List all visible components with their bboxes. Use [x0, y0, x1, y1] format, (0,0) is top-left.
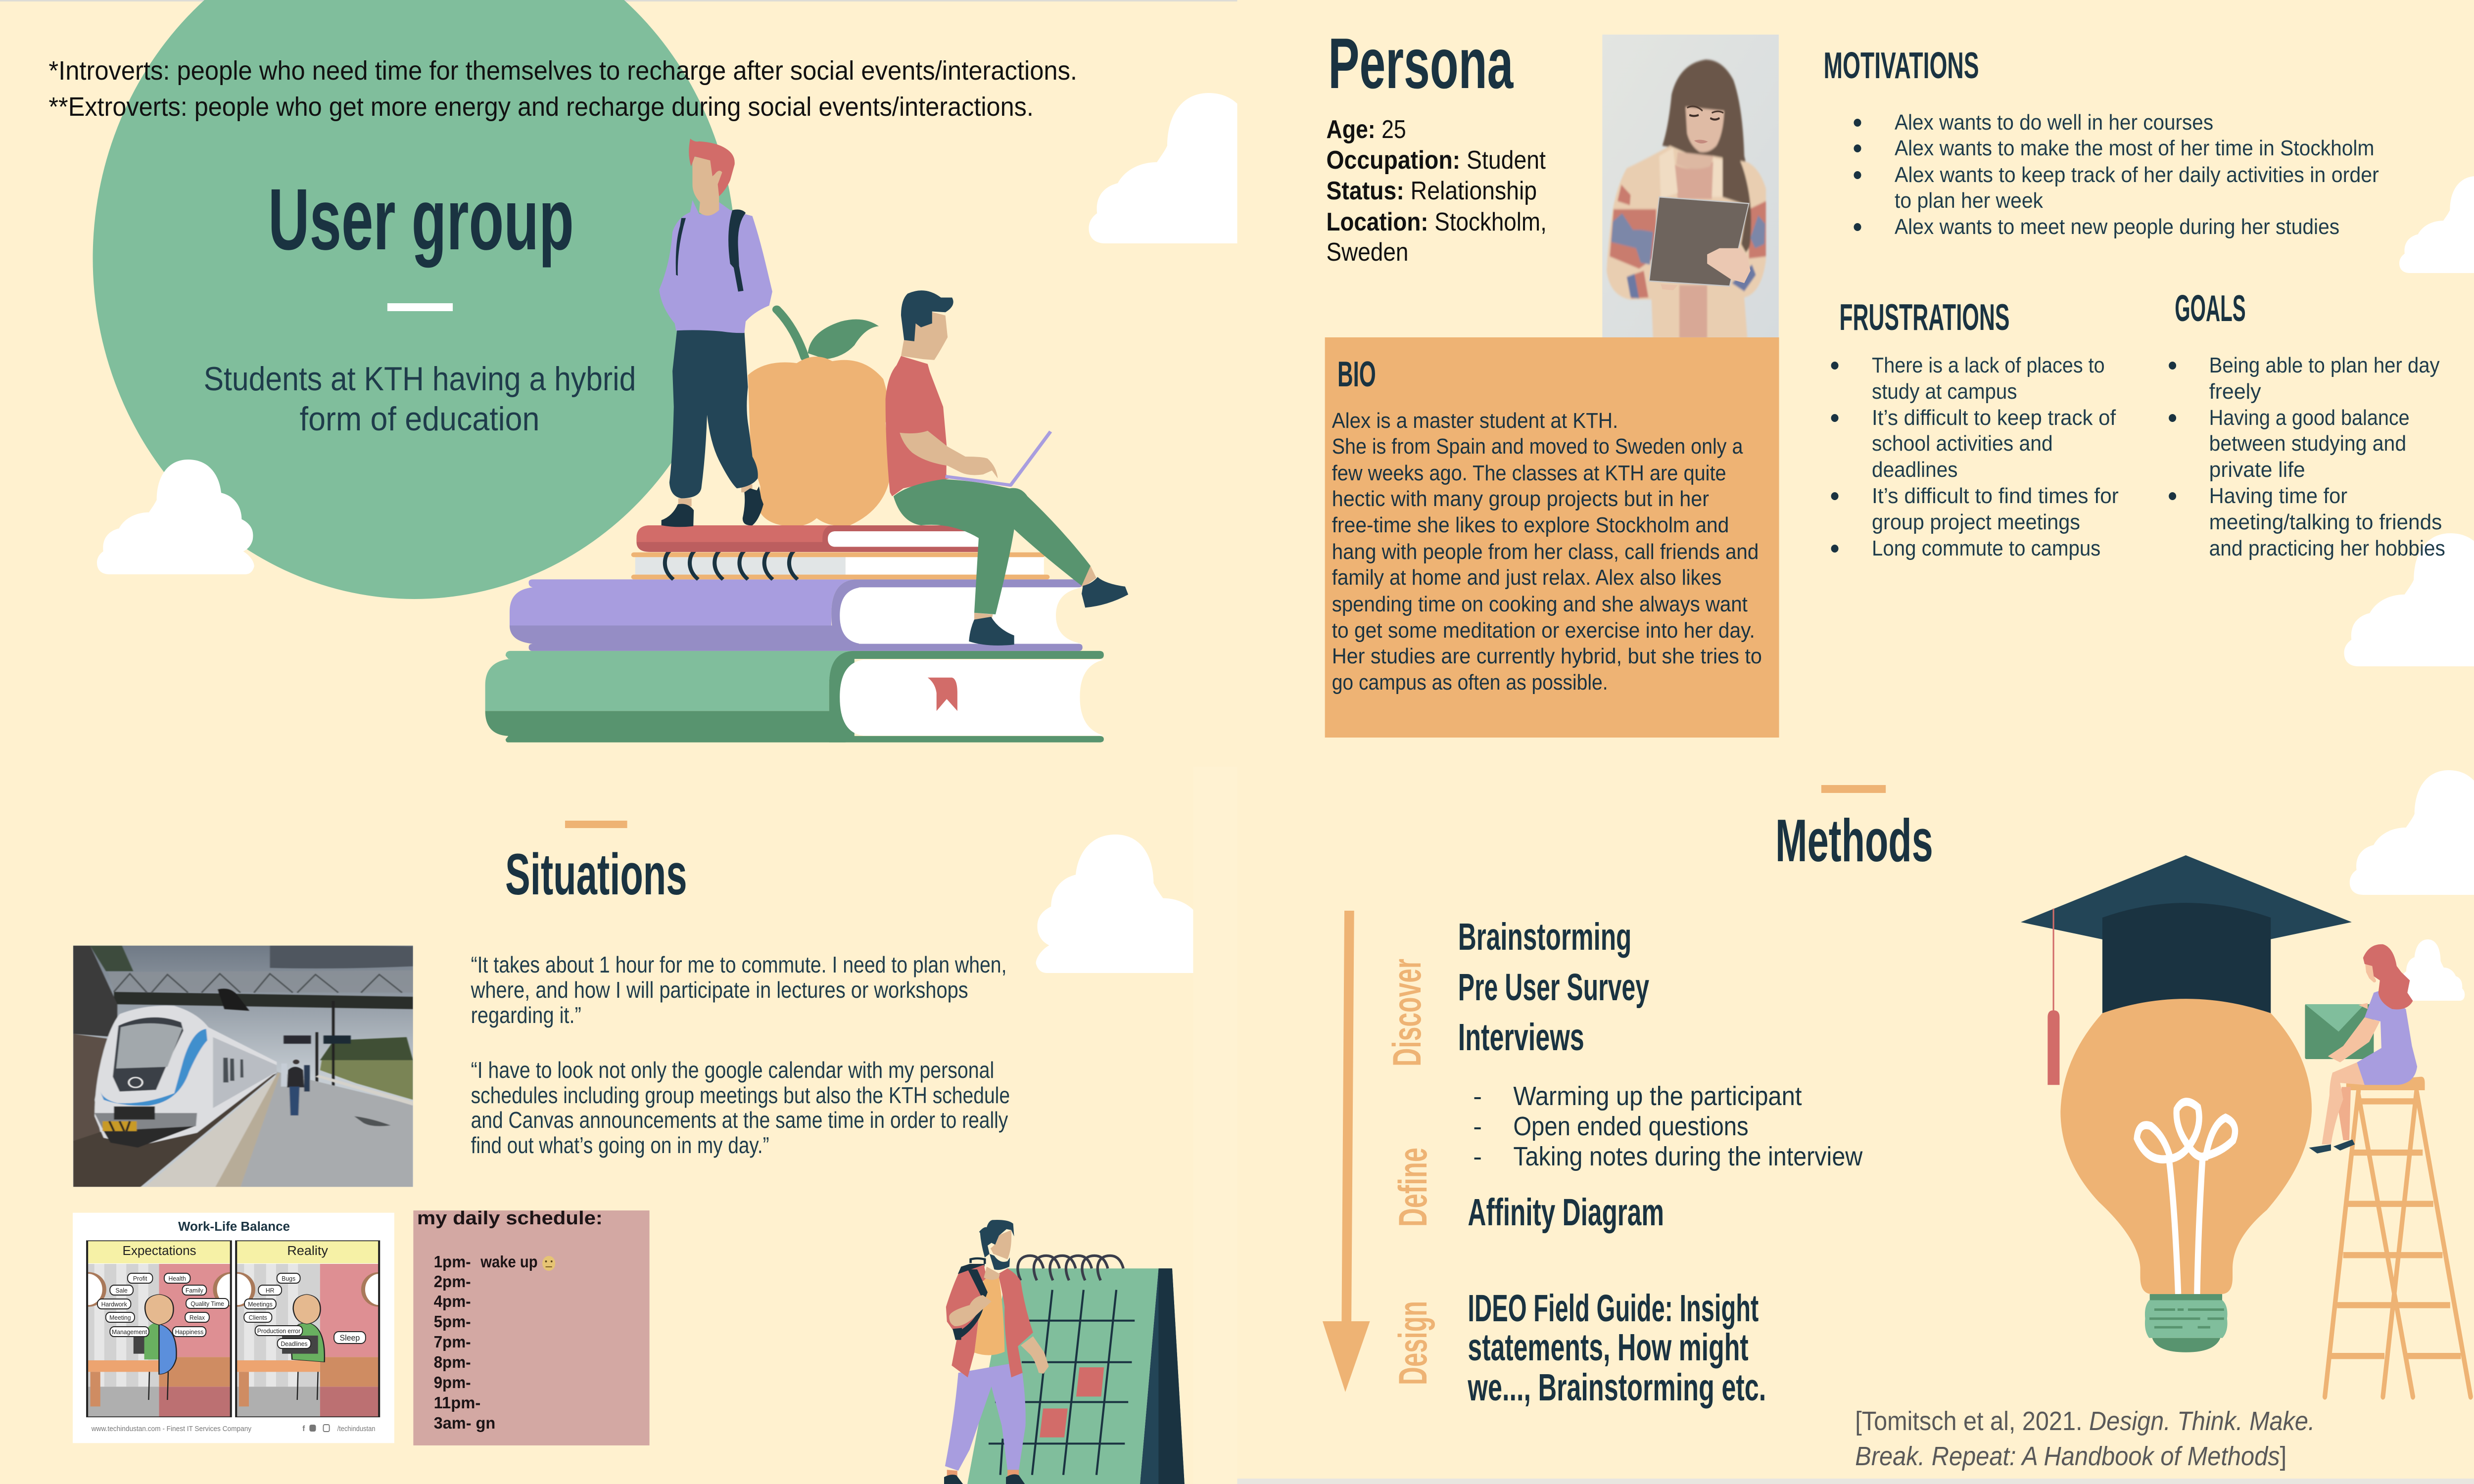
bio text: go campus as often as possible.: [1332, 670, 1608, 695]
comic labels: Reality: [287, 1244, 328, 1258]
comic labels: www.techindustan.com - Finest IT Services Company: [91, 1425, 252, 1433]
graduation cap: [2021, 855, 2352, 1085]
persona facts: Sweden: [1326, 237, 1408, 266]
schedule times: 11pm-: [434, 1393, 480, 1412]
woman with envelope: [2305, 944, 2417, 1154]
subtitle: [204, 360, 636, 437]
quotes: [471, 953, 1010, 1158]
persona facts: Occupation: Student: [1326, 145, 1546, 174]
notebook with spiral: [631, 546, 1049, 579]
bio text: family at home and just relax. Alex also likes: [1332, 565, 1721, 590]
panel: bio: [1325, 337, 1779, 738]
list: frustrations: [1831, 353, 2119, 560]
quote: commute: regarding it.”: [471, 1003, 581, 1028]
man with backpack: [944, 1220, 1049, 1484]
list: motivations: Alex wants to make the most of her time in Stockholm: [1895, 136, 2374, 160]
bio text: [1332, 409, 1762, 695]
comic labels: Expectations: [123, 1244, 196, 1258]
heading: User group: User group: [268, 171, 574, 268]
quote: calendars: [471, 1058, 1010, 1158]
footnote: introverts and extroverts: *Introverts: people who need time for themselves to recharge after social events/interactions.: [48, 56, 1077, 86]
define method: Affinity Diagram: [1468, 1191, 1664, 1234]
bio text: few weeks ago. The classes at KTH are quite: [1332, 461, 1726, 485]
bio text: to get some meditation or exercise into her day.: [1332, 618, 1755, 643]
quote: calendars: find out what’s going on in my day.”: [471, 1133, 769, 1158]
interview notes list: Taking notes during the interview: [1513, 1142, 1862, 1171]
persona facts: Status: Relationship: [1326, 176, 1537, 205]
heading: Goals: GOALS: [2175, 288, 2246, 329]
label: Design: Design: [1390, 1301, 1435, 1385]
citation: [1855, 1407, 2315, 1471]
citation: [Tomitsch et al, 2021. Design. Think. Make.: [1855, 1407, 2315, 1436]
comic labels: Relax: [190, 1314, 205, 1321]
comic labels: Clients: [249, 1314, 267, 1321]
comic labels: Quality Time: [190, 1300, 224, 1307]
heading: Situations: Situations: [505, 842, 687, 907]
quote: calendars: schedules including group meetings but also the KTH schedule: [471, 1083, 1010, 1108]
list: motivations: [1854, 110, 2379, 239]
design methods: IDEO Field Guide: Insight: [1468, 1287, 1759, 1330]
interview notes list: Open ended questions: [1513, 1112, 1749, 1141]
list: motivations: Alex wants to meet new people during her studies: [1895, 215, 2339, 239]
comic labels: Management: [112, 1329, 147, 1336]
heading: Persona: Persona: [1328, 23, 1514, 103]
design methods: statements, How might: [1468, 1326, 1749, 1369]
subtitle: form of education: [300, 400, 539, 437]
panel: methods: [1323, 770, 2474, 1471]
orange dash: [1821, 785, 1886, 793]
schedule times: 1pm-: [434, 1252, 471, 1271]
schedule times: 9pm-: [434, 1373, 471, 1391]
white dash: [387, 303, 453, 311]
comic labels: Deadlines: [281, 1341, 308, 1347]
heading: Frustrations: FRUSTRATIONS: [1839, 297, 2010, 338]
schedule times: 4pm-: [434, 1292, 471, 1310]
label: Define: Define: [1390, 1148, 1435, 1227]
cloud: methods top right: [2350, 770, 2474, 895]
comic labels: Meetings: [248, 1301, 273, 1308]
footnote: introverts and extroverts: **Extroverts: people who get more energy and recharge during social events/interactions.: [48, 93, 1034, 122]
schedule times: 7pm-: [434, 1333, 471, 1351]
orange dash: [565, 821, 627, 828]
bio text: spending time on cooking and she always want: [1332, 592, 1748, 616]
discover methods: Interviews: [1458, 1016, 1584, 1059]
comic labels: Hardwork: [101, 1301, 127, 1308]
heading: Methods: Methods: [1775, 807, 1933, 875]
comic labels: Bugs: [282, 1275, 295, 1282]
list: goals: Having time for: [2209, 484, 2347, 508]
persona facts: Location: Stockholm,: [1326, 207, 1547, 236]
list: goals: private life: [2209, 458, 2305, 482]
persona facts: [1326, 115, 1547, 266]
bio text: She is from Spain and moved to Sweden only a: [1332, 434, 1743, 459]
comic labels: Sleep: [340, 1334, 360, 1343]
subtitle: Students at KTH having a hybrid: [204, 360, 636, 397]
cloud: upper right: [1089, 93, 1237, 243]
comic labels: /techindustan: [337, 1425, 375, 1433]
list: motivations: Alex wants to keep track of her daily activities in order: [1895, 163, 2379, 187]
light bulb: [2060, 999, 2312, 1352]
calendar: [967, 1255, 1185, 1484]
heading: Motivations: MOTIVATIONS: [1824, 45, 1979, 87]
list: frustrations: deadlines: [1872, 458, 1957, 482]
panel: persona: [1325, 23, 2474, 738]
photo: train at station: [73, 945, 413, 1187]
cloud: right upper: [2399, 176, 2474, 273]
arrow: process direction: [1323, 911, 1370, 1392]
panel: user group: [48, 0, 1295, 742]
icon: neutral face emoji: [542, 1256, 555, 1271]
list: motivations: Alex wants to do well in her courses: [1895, 110, 2213, 135]
discover methods: Pre User Survey: [1458, 966, 1649, 1009]
cloud: right lower: [2344, 533, 2474, 666]
list: frustrations: There is a lack of places to: [1872, 353, 2105, 377]
comic labels: [91, 1219, 375, 1433]
ladder: [2325, 1077, 2471, 1396]
bio text: hectic with many group projects but in her: [1332, 487, 1709, 511]
green circle background: [93, 0, 736, 599]
list: goals: [2169, 353, 2445, 560]
comic labels: Sale: [115, 1287, 128, 1294]
schedule times: 3am- gn: [434, 1414, 495, 1432]
cloud: lower left: [97, 460, 254, 574]
footnote: introverts and extroverts: [48, 56, 1077, 122]
interview notes list: Warming up the participant: [1513, 1082, 1802, 1111]
list: goals: and practicing her hobbies: [2209, 536, 2445, 560]
comic labels: Meeting: [109, 1314, 131, 1321]
bio text: Her studies are currently hybrid, but she tries to: [1332, 644, 1762, 668]
list: goals: freely: [2209, 379, 2261, 404]
comic labels: Profit: [133, 1275, 147, 1282]
list: frustrations: Long commute to campus: [1872, 536, 2100, 560]
panel: situations: [72, 821, 1226, 1484]
discover methods: Brainstorming: [1458, 915, 1631, 958]
list: goals: between studying and: [2209, 431, 2406, 456]
book: red: [636, 525, 981, 552]
comic labels: f: [302, 1425, 305, 1433]
illustration: light bulb, cap and woman on ladder: [2021, 855, 2471, 1396]
apple: [748, 310, 890, 526]
book: green: [485, 651, 1104, 742]
comic labels: Happiness: [175, 1329, 203, 1336]
student sitting with laptop: [886, 290, 1128, 646]
list: goals: Being able to plan her day: [2209, 353, 2440, 377]
interview notes list: [1475, 1082, 1862, 1171]
heading: BIO: BIO: [1337, 354, 1376, 394]
quote: calendars: “I have to look not only the google calendar with my personal: [471, 1058, 994, 1083]
schedule times: 5pm-: [434, 1312, 471, 1331]
list: motivations: to plan her week: [1895, 188, 2044, 213]
list: goals: meeting/talking to friends: [2209, 510, 2442, 534]
comic: work-life balance: [72, 1213, 395, 1443]
list: goals: Having a good balance: [2209, 406, 2410, 430]
quote: commute: “It takes about 1 hour for me to commute. I need to plan when,: [471, 953, 1007, 977]
cloud: behind woman: [2401, 939, 2465, 1001]
book: purple: [510, 579, 1083, 651]
list: frustrations: study at campus: [1872, 379, 2017, 404]
schedule times: [434, 1252, 538, 1432]
list: frustrations: school activities and: [1872, 431, 2053, 456]
student standing: [659, 139, 772, 527]
bio text: free-time she likes to explore Stockholm and: [1332, 513, 1729, 537]
comic labels: HR: [266, 1287, 274, 1294]
illustration: students on books: [485, 139, 1128, 742]
cloud: situations: [1036, 835, 1193, 973]
comic labels: Work-Life Balance: [178, 1219, 290, 1234]
persona facts: Age: 25: [1326, 115, 1406, 143]
list: frustrations: group project meetings: [1872, 510, 2080, 534]
bio text: hang with people from her class, call friends and: [1332, 540, 1759, 564]
photo: woman holding tablet: [1602, 35, 1779, 338]
comic labels: Production error: [257, 1328, 300, 1335]
list: frustrations: It’s difficult to keep track of: [1872, 406, 2116, 430]
quote: commute: [471, 953, 1007, 1028]
schedule times: 8pm-: [434, 1353, 471, 1371]
quote: commute: where, and how I will participate in lectures or workshops: [471, 978, 968, 1003]
illustration: man and calendar: [944, 1220, 1185, 1484]
comic labels: Family: [186, 1287, 203, 1294]
design methods: [1468, 1287, 1766, 1409]
bio text: Alex is a master student at KTH.: [1332, 409, 1618, 433]
label: Discover: Discover: [1384, 959, 1429, 1067]
citation: Break. Repeat: A Handbook of Methods]: [1855, 1442, 2286, 1471]
panel: my daily schedule: [413, 1207, 650, 1445]
list: frustrations: It’s difficult to find times for: [1872, 484, 2119, 508]
schedule times: wake up: [480, 1252, 538, 1271]
schedule title: my daily schedule:: [417, 1207, 603, 1228]
discover methods: [1458, 915, 1649, 1059]
schedule times: 2pm-: [434, 1272, 471, 1291]
quote: calendars: and Canvas announcements at the same time in order to really: [471, 1108, 1008, 1133]
comic labels: Health: [169, 1275, 186, 1282]
design methods: we..., Brainstorming etc.: [1468, 1366, 1766, 1409]
